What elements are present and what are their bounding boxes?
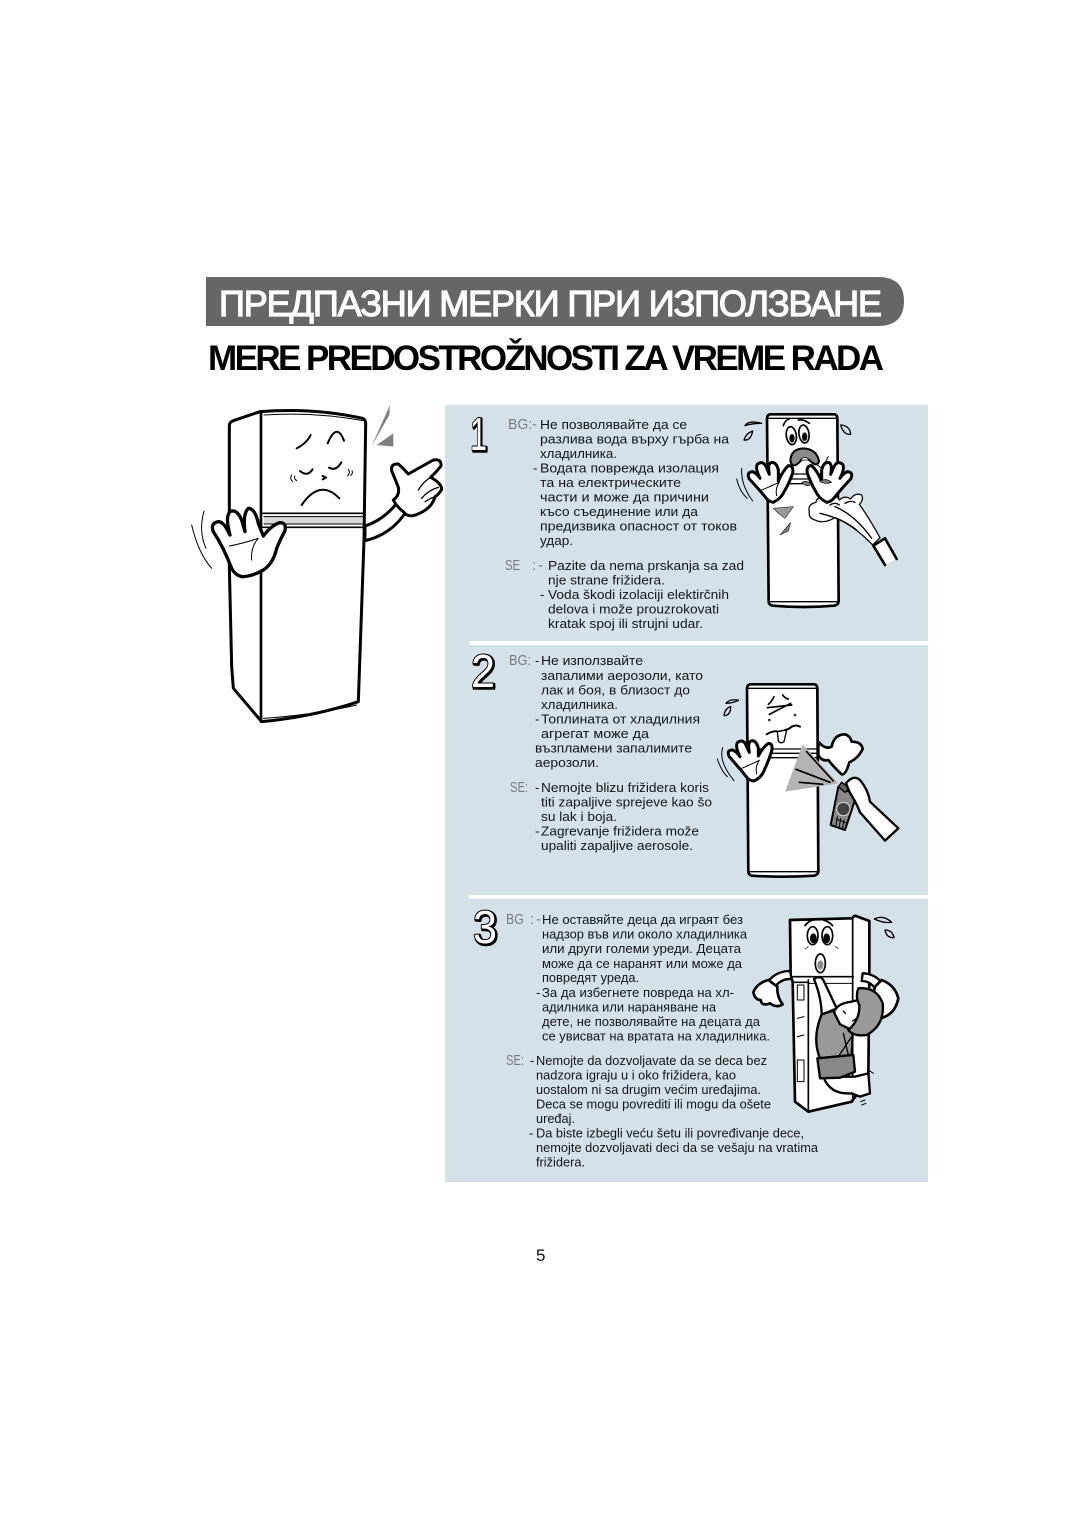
text block: warning 2 Bulgarian: възпламени запалимите	[535, 740, 692, 756]
text block: warning 2 Bulgarian	[509, 652, 703, 770]
text block: warning 2 Bulgarian: аерозоли.	[535, 755, 599, 770]
face	[805, 920, 838, 973]
text block: warning 2 Serbian: su lak i boja.	[541, 809, 617, 824]
right hand	[818, 734, 863, 774]
text block: warning 3 Serbian: frižidera.	[536, 1154, 585, 1170]
text block: warning 1 Bulgarian: части и може да причини	[540, 490, 709, 504]
text block: warning 1 Bulgarian: та на електрическите	[540, 475, 681, 490]
text block: warning 2 Serbian: -	[535, 824, 539, 838]
text block: warning 3 Serbian	[506, 1052, 819, 1170]
text block: warning 1 Bulgarian: хладилника.	[540, 446, 617, 461]
text block: warning 2 Bulgarian: Топлината от хладилния	[541, 712, 700, 726]
text block: warning 1 Serbian: : -	[532, 557, 543, 574]
hand and arm	[846, 778, 898, 841]
text block: warning 3 Serbian: -	[529, 1126, 533, 1140]
text block: warning 2 Bulgarian: BG:	[509, 652, 531, 669]
alert marks	[372, 405, 393, 447]
right arm	[365, 503, 405, 541]
left hand	[728, 741, 772, 781]
number 3: 3	[474, 902, 498, 954]
text block: warning 2 Serbian: upaliti zapaljive aerosole.	[541, 838, 693, 853]
right arm and hand	[862, 973, 882, 988]
text block: warning 3 Serbian: uostalom ni sa drugim većim uređajima.	[536, 1082, 761, 1097]
illustration: fridge with aerosol spray	[717, 684, 903, 877]
text block: warning 3 Bulgarian: BG	[506, 911, 524, 928]
motion lines	[737, 468, 753, 501]
text block: warning 3 Bulgarian: : -	[530, 911, 541, 928]
aerosol can	[831, 782, 857, 830]
text block: warning 3 Serbian: nadzora igraju u i oko frižidera, kao	[536, 1068, 736, 1082]
text block: warning 1 Serbian: -	[540, 587, 544, 602]
text block: warning 3 Bulgarian: може да се наранят или може да	[542, 956, 743, 971]
text block: warning 3 Serbian: Deca se mogu povrediti ili mogu da ošete	[536, 1096, 771, 1112]
page number: 5	[536, 1246, 545, 1265]
panel: warnings background	[445, 405, 928, 1182]
text block: warning 3 Bulgarian	[506, 911, 770, 1044]
text block: warning 2 Bulgarian: лак и боя, в близост до	[541, 682, 690, 698]
illustration: child hanging on fridge door	[753, 916, 898, 1112]
motion lines	[717, 748, 734, 781]
text block: warning 3 Bulgarian: надзор във или около хладилника	[542, 926, 748, 942]
left hand	[212, 508, 285, 577]
text block: warning 2 Serbian: Nemojte blizu frižidera koris	[541, 780, 710, 795]
text block: warning 1 Serbian: Pazite da nema prskanja sa zad	[548, 558, 744, 573]
water spray and hose	[809, 494, 897, 565]
text block: warning 2 Serbian	[510, 779, 712, 853]
number 1	[470, 408, 488, 461]
text block: warning 2 Bulgarian: хладилника.	[541, 697, 618, 712]
text block: warning 2 Serbian: SE:	[510, 779, 528, 796]
sweat drops	[744, 422, 851, 440]
text block: warning 1 Bulgarian: Водата поврежда изолация	[540, 460, 719, 476]
text block: warning 2 Serbian: titi zapaljive sprejeve kao šo	[541, 794, 712, 810]
text block: warning 1 Bulgarian	[508, 416, 737, 548]
number 1: 1	[471, 409, 488, 461]
fridge body	[767, 414, 839, 607]
number 2: 2	[472, 646, 496, 698]
text block: warning 1 Serbian: kratak spoj ili strujni udar.	[548, 616, 703, 631]
title banner: Bulgarian heading: ПРЕДПАЗНИ МЕРКИ ПРИ ИЗПОЛЗВАНЕ	[219, 283, 882, 324]
text block: warning 2 Bulgarian: Не използвайте	[541, 653, 643, 668]
door divider	[263, 513, 364, 527]
text block: warning 3 Bulgarian: дете, не позволявайте на децата да	[542, 1014, 761, 1029]
text block: warning 2 Bulgarian: -	[535, 712, 539, 726]
number 2: 2	[471, 645, 495, 697]
text block: warning 3 Bulgarian: адилника или нараняване на	[542, 1000, 717, 1014]
text block: warning 1 Bulgarian: удар.	[540, 533, 573, 548]
text block: warning 1 Bulgarian: разлива вода върху гърба на	[540, 432, 730, 446]
text block: warning 3 Bulgarian: се увисват на вратата на хладилника.	[542, 1028, 770, 1044]
text block: warning 1 Bulgarian: BG:-	[508, 416, 537, 433]
left arm and hand	[768, 971, 792, 987]
text block: warning 1 Bulgarian: Не позволявайте да се	[540, 417, 687, 432]
text block: warning 2 Bulgarian: -	[535, 653, 539, 668]
stains	[773, 507, 793, 518]
fridge body	[229, 410, 366, 722]
sweat drops	[874, 917, 894, 938]
text block: warning 1 Serbian	[505, 557, 744, 631]
text block: warning 3 Bulgarian: или други големи уреди. Децата	[542, 941, 742, 956]
text block: warning 3 Bulgarian: -	[536, 985, 540, 1000]
right hand	[807, 462, 852, 502]
text block: warning 1 Bulgarian: -	[533, 460, 537, 476]
text block: warning 3 Bulgarian: повредят уреда.	[542, 970, 639, 985]
spray cloud	[785, 744, 838, 792]
text block: warning 2 Bulgarian: агрегат може да	[541, 726, 650, 741]
number 1: 1	[470, 408, 487, 460]
child	[814, 977, 883, 1105]
illustration: large refrigerator character warning	[192, 405, 442, 722]
text block: warning 1 Bulgarian: предизвика опасност от токов	[540, 518, 737, 534]
illustration: fridge with water spray	[737, 414, 897, 607]
heading: Serbian title: MERE PREDOSTROŽNOSTI ZA VREME RADA	[208, 338, 884, 378]
face	[783, 419, 828, 468]
text block: warning 3 Bulgarian: Не оставяйте деца да играят без	[542, 912, 743, 927]
text block: warning 1 Bulgarian: късо съединение или да	[540, 504, 699, 519]
text block: warning 3 Serbian: -	[530, 1053, 534, 1068]
text block: warning 3 Serbian: SE:	[506, 1052, 524, 1069]
text block: warning 2 Bulgarian: запалими аерозоли, като	[541, 668, 703, 683]
fridge body	[747, 684, 818, 877]
text block: warning 2 Serbian: -	[535, 780, 539, 795]
text block: warning 3 Serbian: Da biste izbegli veću šetu ili povređivanje dece,	[536, 1126, 804, 1140]
number 3: 3	[473, 901, 497, 953]
face	[767, 695, 800, 743]
text block: warning 1 Serbian: nje strane frižidera.	[548, 572, 665, 588]
text block: warning 3 Serbian: nemojte dozvoljavati deci da se vešaju na vratima	[536, 1140, 819, 1155]
door shelves	[797, 985, 804, 1082]
text block: warning 1 Serbian: Voda škodi izolaciji elektirčnih	[548, 587, 729, 602]
sweat drops	[724, 700, 738, 716]
left hand	[748, 462, 793, 502]
text block: warning 3 Serbian: Nemojte da dozvoljavate da se deca bez	[536, 1053, 767, 1068]
text block: warning 1 Serbian: delova i može prouzrokovati	[548, 602, 719, 616]
text block: warning 1 Serbian: SE	[505, 557, 520, 574]
face	[291, 432, 352, 505]
fridge body	[790, 916, 869, 1112]
right hand pointing	[392, 460, 442, 516]
text block: warning 2 Serbian: Zagrevanje frižidera može	[541, 824, 699, 838]
text block: warning 3 Bulgarian: За да избегнете повреда на хл-	[542, 985, 734, 1000]
text block: warning 3 Serbian: uređaj.	[536, 1111, 575, 1126]
